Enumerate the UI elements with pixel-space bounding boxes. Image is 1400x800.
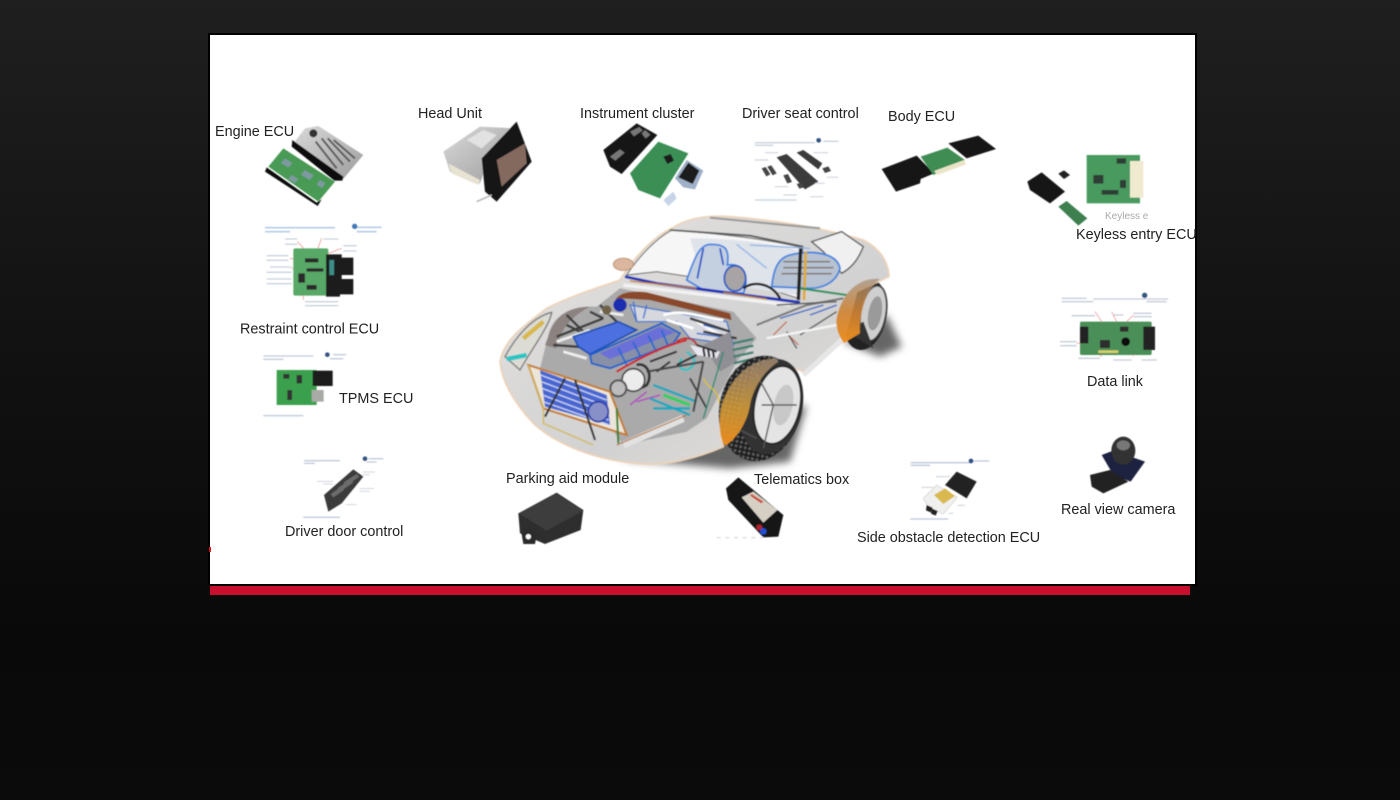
display bbox=[678, 163, 699, 184]
module: body ECU bbox=[882, 136, 996, 192]
diagram header bbox=[1062, 298, 1168, 302]
label: Parking aid module: Parking aid module bbox=[506, 471, 629, 487]
module: restraint control ECU bbox=[265, 224, 382, 306]
base bbox=[923, 485, 957, 514]
small parts bbox=[762, 165, 831, 189]
circuit board bbox=[277, 370, 317, 405]
chips bbox=[1093, 158, 1126, 195]
red tick mark bbox=[209, 547, 211, 552]
module: TPMS ECU bbox=[263, 352, 346, 416]
mounting tab bbox=[522, 528, 537, 544]
module: data link bbox=[1060, 293, 1168, 360]
connector bbox=[313, 371, 333, 386]
printed label bbox=[742, 492, 777, 523]
front wheel bbox=[709, 348, 812, 469]
annotations bbox=[921, 477, 965, 513]
annotations bbox=[267, 239, 357, 306]
engine covers bbox=[573, 322, 680, 368]
module: telematics box bbox=[717, 477, 783, 538]
module: instrument cluster bbox=[603, 123, 703, 206]
lower chassis bbox=[448, 163, 480, 185]
display frame bbox=[675, 160, 703, 189]
ground shadow bbox=[527, 315, 902, 468]
screen bbox=[497, 143, 527, 187]
circuit board bbox=[1080, 322, 1152, 355]
label: Driver door control: Driver door control bbox=[285, 524, 403, 540]
board connector bbox=[265, 167, 322, 206]
annotations bbox=[1060, 313, 1157, 360]
switch pack bbox=[324, 469, 363, 512]
brand dot bbox=[1142, 293, 1147, 298]
diagram header bbox=[303, 459, 383, 517]
small board bbox=[1058, 201, 1087, 226]
connector strip bbox=[1130, 161, 1143, 198]
circuit board bbox=[630, 142, 688, 198]
base connectors bbox=[926, 505, 938, 516]
engine wiring and pulleys bbox=[610, 338, 723, 445]
leader lines bbox=[290, 238, 342, 300]
housing bbox=[518, 493, 583, 544]
label: Telematics box: Telematics box bbox=[754, 472, 850, 488]
bracket bbox=[477, 195, 492, 202]
diagram header bbox=[263, 355, 346, 416]
radiator bbox=[528, 365, 627, 445]
metal housing bbox=[293, 126, 363, 180]
connectors bbox=[1080, 327, 1155, 350]
switches bbox=[331, 474, 359, 497]
mounting hole bbox=[309, 129, 317, 137]
key fob bbox=[1027, 172, 1065, 203]
red footer bar bbox=[210, 586, 1190, 595]
annotations bbox=[317, 472, 375, 505]
cover openings bbox=[610, 127, 650, 161]
chips bbox=[298, 258, 323, 290]
metal plug bbox=[312, 390, 324, 402]
label: Restraint control ECU: Restraint control ECU bbox=[240, 322, 379, 338]
circuit board bbox=[1087, 155, 1140, 203]
seats bbox=[687, 244, 840, 293]
components bbox=[283, 374, 302, 400]
label: Body ECU: Body ECU bbox=[888, 109, 955, 125]
diagram header bbox=[910, 461, 989, 519]
diagram header bbox=[265, 227, 382, 232]
label: Keyless entry ECU: Keyless entry ECU bbox=[1076, 227, 1197, 243]
label: Instrument cluster: Instrument cluster bbox=[580, 106, 695, 122]
sensor chip bbox=[1058, 170, 1070, 179]
brand dot bbox=[363, 456, 367, 461]
chips bbox=[1100, 327, 1128, 348]
circuit board bbox=[293, 248, 328, 296]
lens bbox=[1117, 440, 1130, 450]
brand dot bbox=[352, 224, 357, 229]
module: driver seat control bbox=[755, 138, 838, 200]
label: TPMS ECU: TPMS ECU bbox=[339, 391, 413, 407]
headlight bbox=[505, 312, 552, 370]
label strip bbox=[1098, 350, 1118, 353]
module: side obstacle detection ECU bbox=[910, 459, 989, 519]
front suspension spring bbox=[733, 339, 753, 395]
connector bbox=[1090, 470, 1128, 493]
yellow board bbox=[934, 488, 955, 504]
module: keyless entry ECU bbox=[1027, 155, 1143, 226]
steering wheel and dash bbox=[623, 248, 847, 305]
module: head unit bbox=[443, 122, 532, 202]
cover bbox=[603, 123, 657, 174]
cropped caption remnant bbox=[717, 536, 763, 540]
cooling fins bbox=[316, 138, 355, 168]
diagram header bbox=[755, 141, 838, 200]
module: driver door control bbox=[303, 456, 383, 517]
brand dot bbox=[816, 138, 821, 143]
rear fender bbox=[836, 279, 880, 343]
mounting hole bbox=[526, 534, 531, 539]
brand dot bbox=[969, 459, 973, 463]
leader lines bbox=[1077, 312, 1133, 357]
front fender bbox=[719, 358, 778, 446]
circuit board bbox=[921, 148, 965, 175]
label: Real view camera: Real view camera bbox=[1061, 502, 1175, 518]
circuit board bbox=[268, 148, 335, 202]
board chips bbox=[281, 158, 325, 188]
bezel bbox=[482, 122, 532, 202]
label: Head Unit: Head Unit bbox=[418, 106, 482, 122]
top face bbox=[519, 493, 583, 531]
lens barrel bbox=[1111, 437, 1135, 465]
main chip bbox=[663, 154, 674, 164]
annotations bbox=[755, 153, 838, 197]
connector pins bbox=[329, 260, 334, 275]
label: Driver seat control: Driver seat control bbox=[742, 106, 859, 122]
engine bay bbox=[540, 288, 757, 445]
housing connector bbox=[292, 140, 343, 181]
rear wheel bbox=[837, 275, 893, 354]
connectors bbox=[326, 254, 353, 297]
car body shell bbox=[500, 216, 889, 464]
label: Data link: Data link bbox=[1087, 374, 1144, 390]
slide panel bbox=[209, 34, 1196, 585]
caption fragment: Keyless e: Keyless e bbox=[1105, 211, 1149, 222]
windshield and side glass bbox=[627, 218, 863, 298]
brand dot bbox=[325, 352, 330, 357]
lid bbox=[945, 472, 977, 498]
chassis label bbox=[467, 130, 497, 148]
red connector bbox=[756, 524, 762, 530]
blue connector bbox=[760, 528, 767, 535]
connector bbox=[934, 160, 966, 175]
module: parking aid bbox=[518, 493, 583, 544]
bracket bbox=[1102, 451, 1145, 482]
chassis bbox=[443, 127, 515, 183]
side sill and door frame bbox=[757, 298, 843, 375]
label: Side obstacle detection ECU: Side obstacle detection ECU bbox=[857, 530, 1040, 546]
ribbon cable bbox=[663, 192, 677, 206]
car cutaway illustration bbox=[500, 216, 902, 469]
label: Engine ECU: Engine ECU bbox=[215, 124, 294, 140]
right cover bbox=[948, 136, 996, 158]
side mirror bbox=[613, 258, 633, 270]
housing bbox=[726, 477, 783, 537]
label band bbox=[750, 494, 763, 503]
left cover bbox=[882, 156, 934, 192]
module: real view camera bbox=[1090, 437, 1145, 493]
main control parts bbox=[777, 150, 822, 189]
module: engine ECU bbox=[265, 126, 363, 206]
